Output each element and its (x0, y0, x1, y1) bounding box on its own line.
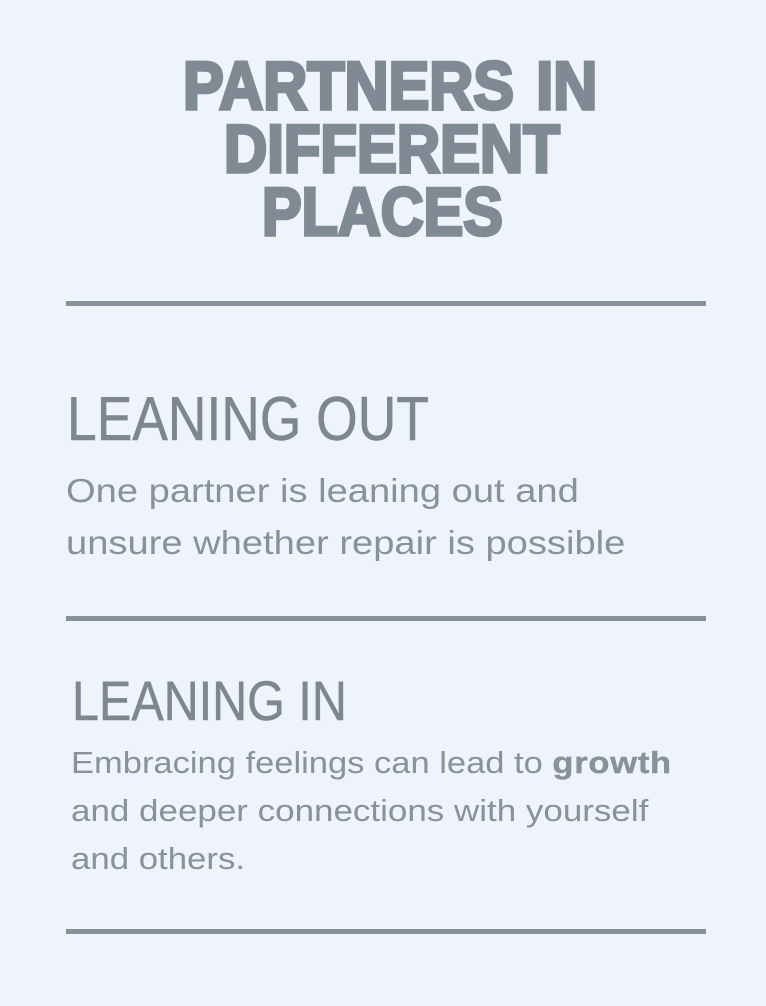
text: leaning in description: and deeper connections with yourself (71, 793, 648, 828)
text: leaning out description: One partner is leaning out and (66, 472, 579, 509)
title: DIFFERENT (224, 111, 560, 187)
heading: leaning out: LEANING OUT (67, 385, 429, 454)
title (183, 48, 597, 250)
text: leaning in description: and others. (71, 841, 245, 876)
heading: leaning in: LEANING IN (72, 669, 347, 732)
text: leaning in description (71, 745, 672, 876)
title: PLACES (262, 174, 503, 250)
title: PARTNERS IN (183, 48, 597, 124)
text: leaning in description: Embracing feelings can lead to growth (71, 745, 672, 780)
text: leaning out description: unsure whether repair is possible (66, 524, 625, 561)
text: leaning out description (66, 472, 625, 561)
